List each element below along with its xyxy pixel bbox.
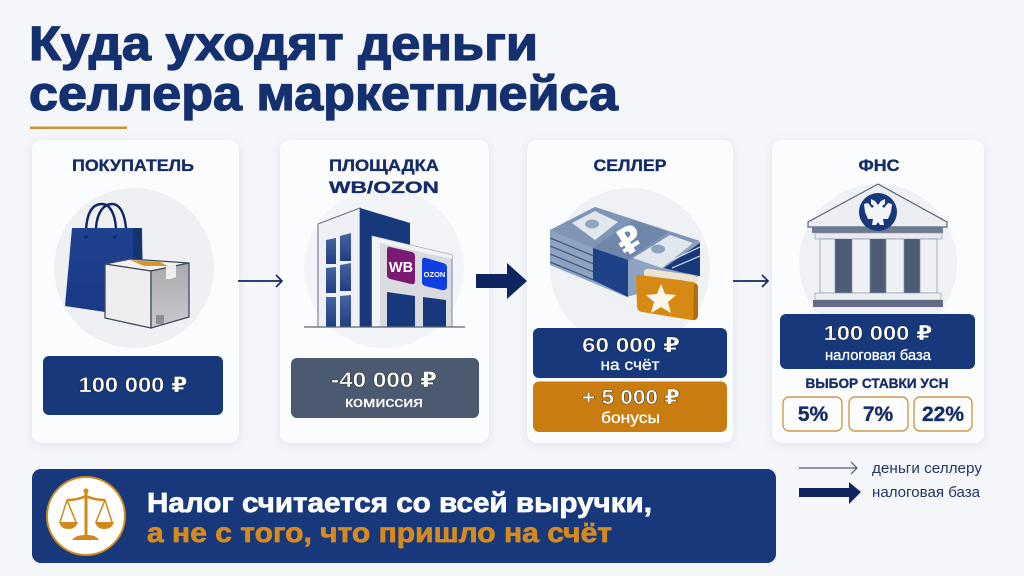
- amount box: 100 000 ₽: [78, 374, 188, 397]
- callout text: а не с того, что пришло на счёт: [147, 517, 612, 548]
- icon: WB logo: [387, 247, 415, 284]
- subheading: выбор ставки: ВЫБОР СТАВКИ УСН: [806, 375, 948, 391]
- icon: bonus wallet: [636, 269, 698, 320]
- commission box: комиссия: [345, 394, 423, 411]
- icon: courthouse: [808, 184, 947, 307]
- heading: селлер: СЕЛЛЕР: [594, 156, 666, 175]
- rate chips: 22%: [922, 403, 964, 426]
- legend: налоговая база: [872, 485, 981, 501]
- box: налоговая база: 100 000 ₽: [824, 323, 933, 345]
- box: налоговая база: [780, 314, 975, 369]
- heading: покупатель: ПОКУПАТЕЛЬ: [72, 156, 194, 175]
- callout text: Налог считается со всей выручки,: [147, 487, 652, 518]
- box: на счёт: на счёт: [600, 357, 660, 374]
- ruble sign: ₽: [608, 216, 651, 264]
- panel: ФНС: [772, 140, 984, 443]
- box: бонусы: + 5 000 ₽: [582, 387, 680, 409]
- panel: площадка: [280, 140, 489, 443]
- heading: ФНС: ФНС: [858, 156, 900, 175]
- arrow: platform to seller: [476, 263, 527, 299]
- heading: площадка: WB/OZON: [329, 178, 439, 197]
- icon: circle backdrop: [54, 188, 214, 348]
- icon: banknote stack: [550, 207, 700, 297]
- title underline: [30, 126, 127, 129]
- panel: селлер: [527, 140, 733, 443]
- arrow: buyer to platform: [238, 275, 282, 287]
- commission box: -40 000 ₽: [331, 369, 437, 392]
- icon: circle backdrop: [799, 184, 957, 342]
- heading: площадка: [329, 156, 439, 197]
- icon: shopping bag: [65, 204, 143, 312]
- icon: circle backdrop: [304, 188, 464, 348]
- amount box: [43, 356, 223, 415]
- title: Куда уходят деньги: [29, 18, 538, 71]
- rate chips: 7%: [863, 403, 893, 426]
- icon: WB logo: WB: [389, 260, 413, 276]
- commission box: [291, 358, 479, 418]
- panel: покупатель: [32, 140, 239, 443]
- icon: parcel box: [105, 259, 189, 328]
- icon: building: [304, 208, 465, 327]
- icon: OZON logo: OZON: [424, 270, 445, 279]
- rate chips: 5%: [798, 403, 828, 426]
- title: [29, 18, 618, 121]
- icon: circle backdrop: [550, 188, 710, 348]
- callout banner: [32, 469, 776, 563]
- rate chips: [783, 397, 972, 431]
- callout text: [147, 487, 652, 548]
- legend: thin arrow: [799, 462, 857, 474]
- box: бонусы: бонусы: [601, 410, 660, 427]
- title: селлера маркетплейса: [29, 68, 618, 121]
- legend: [799, 461, 983, 504]
- box: налоговая база: налоговая база: [825, 347, 932, 364]
- icon: scales: [47, 477, 125, 555]
- box: бонусы: [533, 382, 727, 432]
- box: на счёт: 60 000 ₽: [582, 335, 680, 357]
- legend: thick arrow: [799, 482, 861, 504]
- legend: деньги селлеру: [872, 461, 983, 477]
- icon: OZON logo: [422, 258, 447, 290]
- box: на счёт: [533, 328, 727, 378]
- arrow: seller to tax service: [733, 275, 768, 287]
- heading: площадка: ПЛОЩАДКА: [329, 156, 439, 175]
